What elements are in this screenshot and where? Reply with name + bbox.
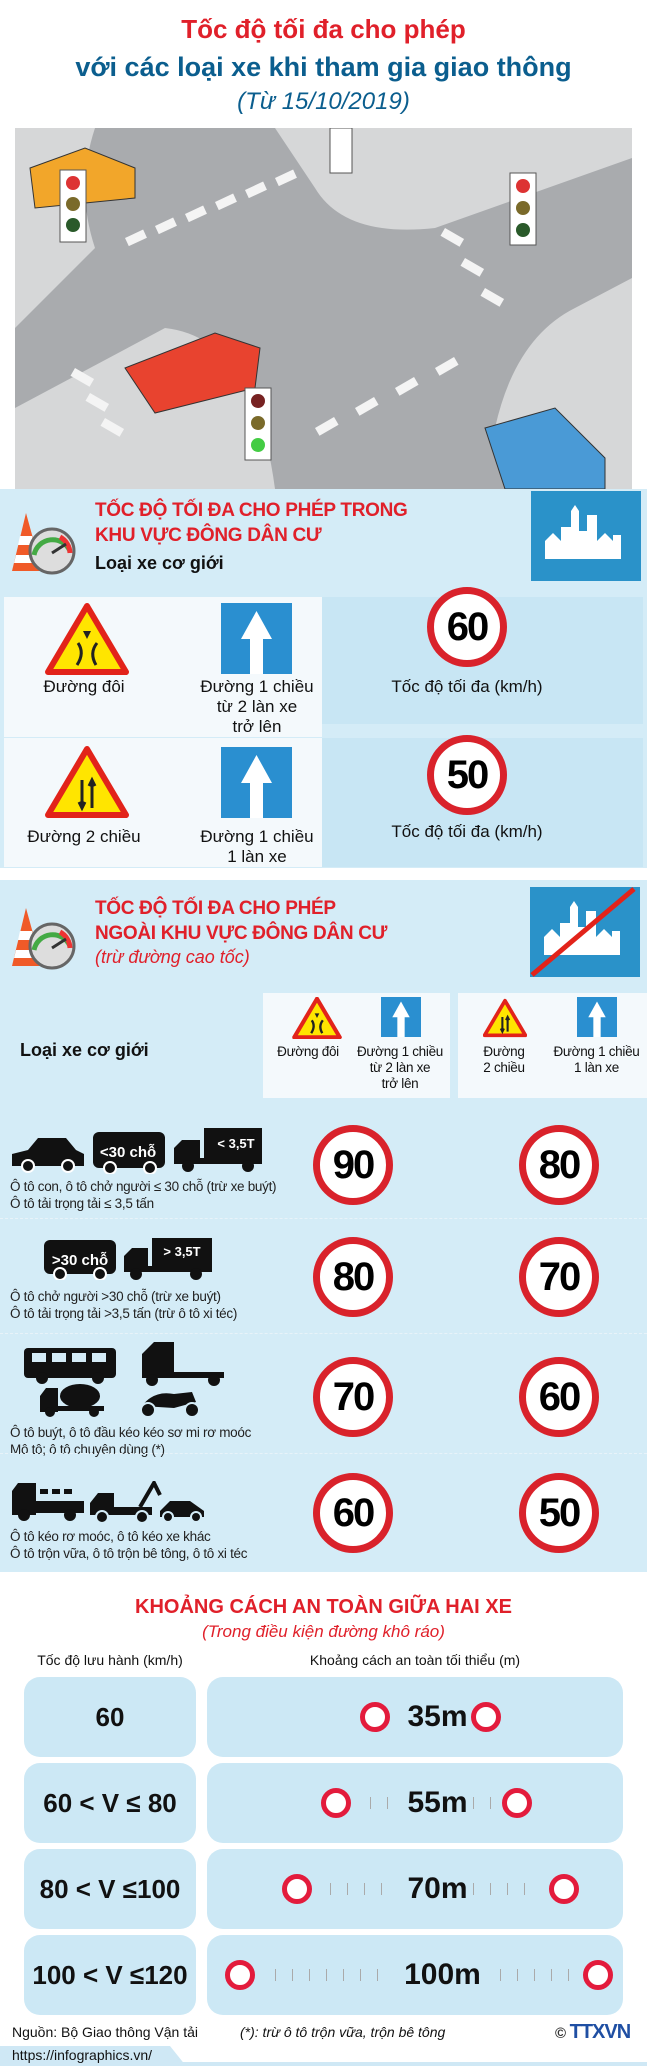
row: 60 km/h — [4, 587, 643, 737]
speed sign 90 — [313, 1125, 393, 1205]
heading — [95, 896, 388, 944]
speed sign 70: 70 — [539, 1254, 579, 1298]
table: safe distance rows: 55m — [407, 1786, 468, 1819]
footer: url bar — [0, 2046, 647, 2066]
row: 60 km/h: trở lên — [233, 717, 281, 736]
row: large buses / heavy trucks — [10, 1237, 599, 1321]
row: 60 km/h: Đường 1 chiều — [200, 677, 314, 696]
speed sign 50: 50 — [539, 1490, 579, 1534]
speed sign 70 — [519, 1237, 599, 1317]
row 60: 60 — [96, 1702, 124, 1732]
logo: TTXVN: © TTXVN — [555, 2021, 630, 2043]
speed sign 60 — [427, 587, 507, 667]
icon: car, minibus, small truck: <30 chỗ — [100, 1144, 156, 1161]
column header: dual / one-way multi-lane: trở lên — [382, 1076, 418, 1091]
speed sign 50 — [519, 1473, 599, 1553]
icon: bus, heavy truck: >30 chỗ — [52, 1252, 108, 1269]
row: 50 km/h: Tốc độ tối đa (km/h) — [391, 822, 543, 841]
icon: tow trucks — [12, 1481, 204, 1522]
row: 50 km/h: 1 làn xe — [227, 847, 287, 866]
row 60-80: 60 < V ≤ 80 — [43, 1788, 177, 1818]
icon: one-way sign — [221, 603, 292, 674]
row 100-120: 100 < V ≤120 — [32, 1960, 188, 1990]
row: cars / small trucks: Ô tô tải trọng tải ≤ 3,5 tấn — [10, 1196, 154, 1211]
icon: car, minibus, small truck — [12, 1128, 262, 1174]
row 60 — [24, 1677, 196, 1757]
speed sign 60: 60 — [333, 1490, 373, 1534]
row: cars / small trucks: Ô tô con, ô tô chở người ≤ 30 chỗ (trừ xe buýt) — [10, 1179, 276, 1194]
row: 60 km/h: Đường đôi — [43, 677, 125, 696]
row: towing trucks, mixers, tankers: Ô tô kéo rơ moóc, ô tô kéo xe khác — [10, 1529, 211, 1544]
speed sign 70 — [313, 1357, 393, 1437]
title: (Từ 15/10/2019) — [237, 88, 410, 115]
row 80-100: 80 < V ≤100 — [40, 1874, 180, 1904]
icon: end of residential area sign — [530, 887, 640, 977]
column header: two-way / one-way single lane: 2 chiều — [483, 1060, 525, 1075]
title — [75, 14, 572, 115]
heading: TỐC ĐỘ TỐI ĐA CHO PHÉP TRONG — [95, 500, 408, 521]
icon: bus, heavy truck: > 3,5T — [163, 1244, 201, 1259]
row: 50 km/h: Đường 2 chiều — [27, 827, 141, 846]
column header: dual / one-way multi-lane: Đường 1 chiều — [357, 1044, 443, 1059]
row: 50 km/h: Đường 1 chiều — [200, 827, 314, 846]
heading: TỐC ĐỘ TỐI ĐA CHO PHÉP — [95, 898, 336, 919]
icon: one-way single lane — [221, 747, 292, 818]
row: towing trucks, mixers, tankers: Ô tô trộn vữa, ô tô trộn bê tông, ô tô xi téc — [10, 1546, 247, 1561]
title: Tốc độ tối đa cho phép — [181, 14, 466, 44]
row: large buses / heavy trucks: Ô tô tải trọng tải >3,5 tấn (trừ ô tô xi téc) — [10, 1306, 237, 1321]
row: 60 km/h: Tốc độ tối đa (km/h) — [391, 677, 543, 696]
row: large buses / heavy trucks: Ô tô chở người >30 chỗ (trừ xe buýt) — [10, 1289, 221, 1304]
panel: inside residential area — [0, 489, 647, 868]
table: safe distance rows — [24, 1677, 623, 2015]
speed sign 80 — [313, 1237, 393, 1317]
row 80-100 — [24, 1849, 196, 1929]
row: 60 km/h: từ 2 làn xe — [217, 697, 297, 716]
footer: note: (*): trừ ô tô trộn vữa, trộn bê tông — [240, 2024, 445, 2040]
column header: dual / one-way multi-lane — [263, 993, 450, 1098]
text: https://infographics.vn/ — [12, 2047, 152, 2063]
row: towing trucks, mixers, tankers — [10, 1473, 599, 1561]
column header: two-way / one-way single lane: Đường — [483, 1044, 525, 1059]
row: buses, tractors, motorbikes: Mô tô; ô tô chuyên dùng (*) — [10, 1442, 165, 1457]
row 60-80 — [24, 1763, 196, 1843]
subheading: Loại xe cơ giới — [20, 1040, 149, 1060]
icon: residential area sign — [531, 491, 641, 581]
speed sign 70: 70 — [333, 1374, 373, 1418]
subheading: Loại xe cơ giới — [95, 553, 224, 573]
heading — [95, 498, 408, 546]
speed sign 60 — [313, 1473, 393, 1553]
speed sign 60: 60 — [539, 1374, 579, 1418]
column header: dual / one-way multi-lane: Đường đôi — [277, 1044, 339, 1059]
column header: two-way / one-way single lane — [458, 993, 647, 1098]
speed sign 80 — [519, 1125, 599, 1205]
heading: safe distance: (Trong điều kiện đường khô ráo) — [202, 1622, 445, 1641]
heading: safe distance: KHOẢNG CÁCH AN TOÀN GIỮA HAI XE — [135, 1596, 512, 1618]
icon: bus, heavy truck — [44, 1238, 212, 1280]
icon: bus, tractor, mixer, motorbike — [24, 1342, 224, 1417]
icon: cone with speedometer — [12, 513, 76, 574]
footer: source: Nguồn: Bộ Giao thông Vận tải — [12, 2024, 198, 2040]
column header: two-way / one-way single lane: 1 làn xe — [574, 1060, 619, 1075]
title: với các loại xe khi tham gia giao thông — [75, 52, 572, 82]
speed sign 80: 80 — [333, 1254, 373, 1298]
row 100-120 — [24, 1935, 196, 2015]
icon: two-way sign — [45, 746, 129, 818]
speed sign 90: 90 — [333, 1142, 373, 1186]
speed sign 80: 80 — [539, 1142, 579, 1186]
icon: cone with speedometer — [12, 908, 76, 970]
panel: outside residential area — [0, 880, 647, 1572]
row: cars / small trucks — [10, 1125, 599, 1211]
table: safe distance rows: 35m — [407, 1700, 468, 1733]
column headers: Tốc độ lưu hành (km/h) — [37, 1652, 183, 1668]
illustration: intersection — [15, 128, 632, 489]
heading: NGOÀI KHU VỰC ĐÔNG DÂN CƯ — [95, 923, 387, 944]
heading: KHU VỰC ĐÔNG DÂN CƯ — [95, 525, 321, 546]
icon: dual road sign — [45, 603, 129, 675]
text: Khoảng cách an toàn tối thiểu (m) — [310, 1652, 520, 1668]
table: safe distance rows: 70m — [407, 1872, 468, 1905]
speed sign 60 — [519, 1357, 599, 1437]
heading: safe distance — [135, 1594, 512, 1641]
speed sign 50 — [427, 735, 507, 815]
speed sign 60: 60 — [447, 604, 487, 648]
row: 50 km/h — [4, 735, 643, 867]
row: buses, tractors, motorbikes — [10, 1342, 599, 1457]
speed sign 50: 50 — [447, 752, 487, 796]
column header: dual / one-way multi-lane: từ 2 làn xe — [370, 1060, 430, 1075]
row: buses, tractors, motorbikes: Ô tô buýt, ô tô đầu kéo kéo sơ mi rơ moóc — [10, 1425, 251, 1440]
column header: two-way / one-way single lane: Đường 1 chiều — [553, 1044, 640, 1059]
icon: car, minibus, small truck: < 3,5T — [217, 1136, 255, 1151]
table: safe distance rows: 100m — [404, 1958, 481, 1991]
subheading italic: (trừ đường cao tốc) — [95, 947, 250, 967]
